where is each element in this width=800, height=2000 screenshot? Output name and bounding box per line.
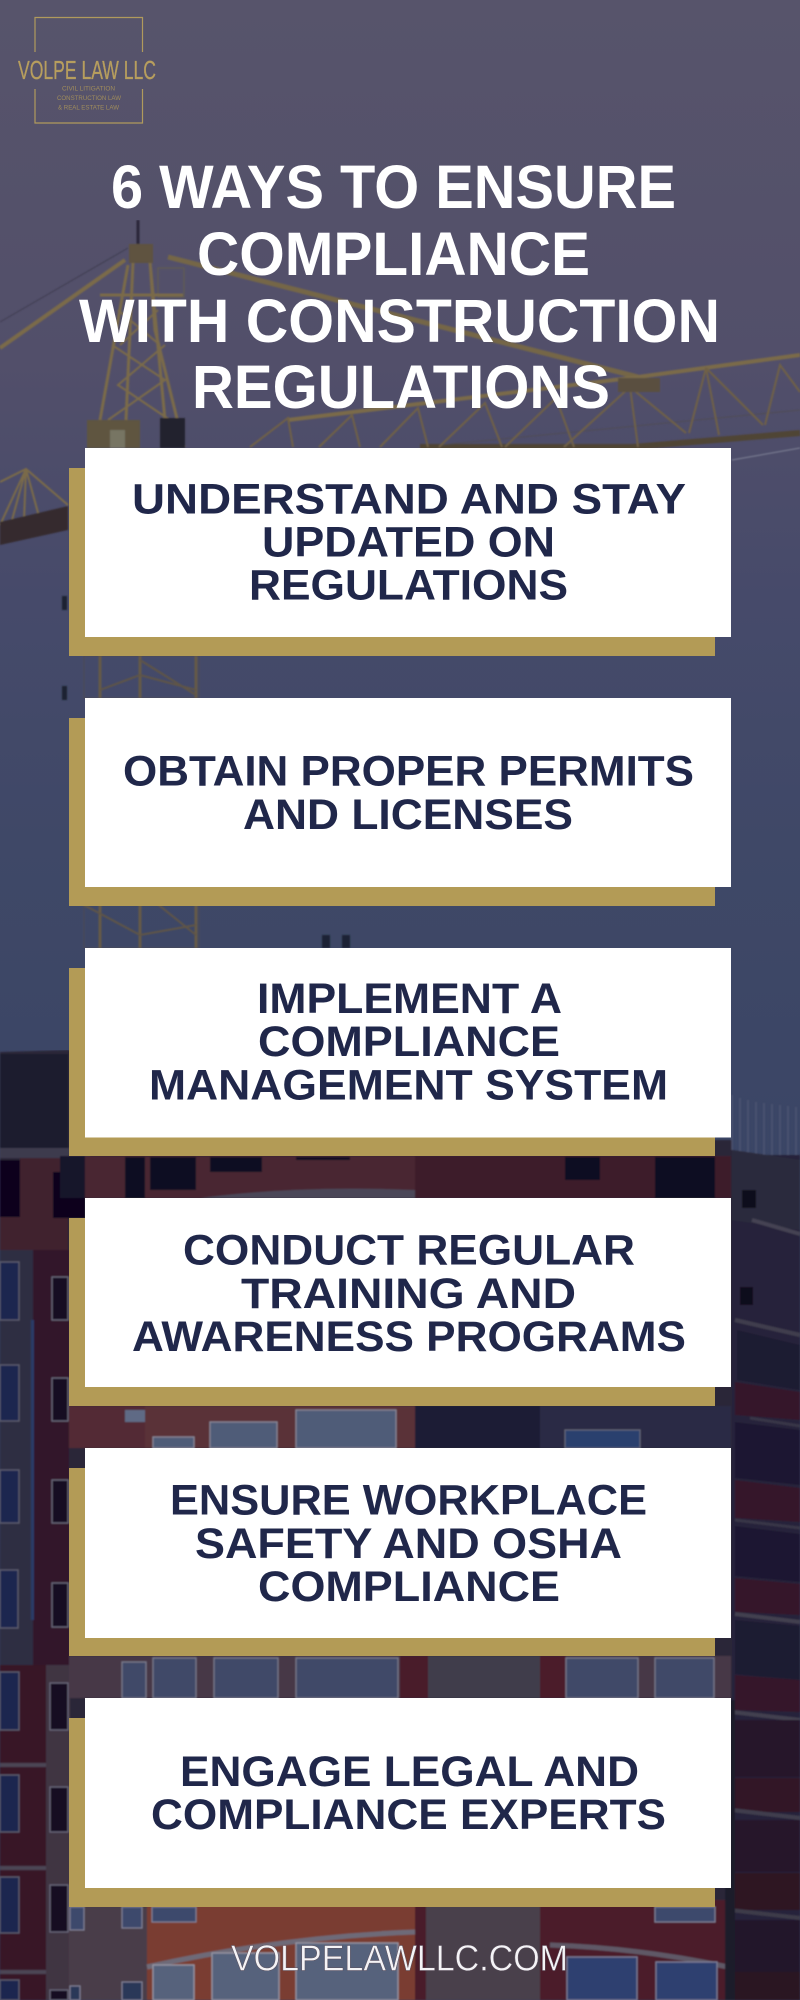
- step 6 text: [151, 1748, 666, 1839]
- white card: [85, 948, 731, 1138]
- step 3 text: COMPLIANCE: [258, 1018, 560, 1066]
- step 3 text: [149, 975, 668, 1110]
- step 5 text: SAFETY AND OSHA: [195, 1520, 622, 1568]
- white card: [85, 1698, 731, 1888]
- step 4 text: AWARENESS PROGRAMS: [132, 1313, 686, 1361]
- left windows: [0, 1262, 19, 1628]
- logo tagline: [57, 86, 121, 112]
- middle strip 3: [69, 1656, 731, 1698]
- panel: step 1: [69, 448, 731, 656]
- step 1 text: UPDATED ON: [262, 518, 555, 566]
- panel: step 5: [69, 1448, 731, 1656]
- step 6 text: ENGAGE LEGAL AND: [180, 1748, 639, 1796]
- logo frame: [35, 18, 142, 123]
- footer website: VOLPELAWLLC.COM: [231, 1938, 568, 1978]
- white card: [85, 1198, 731, 1387]
- background: building: [0, 1050, 800, 2000]
- gold offset block: [69, 1468, 715, 1656]
- title: WITH CONSTRUCTION: [79, 287, 720, 355]
- bottom strip: [69, 1900, 147, 2000]
- middle strip 2: [69, 1406, 145, 1448]
- logo: Volpe Law LLC: [18, 18, 156, 123]
- logo tagline: & REAL ESTATE LAW: [58, 106, 119, 112]
- title: COMPLIANCE: [197, 220, 590, 288]
- logo name: VOLPE LAW LLC: [18, 55, 156, 85]
- gold offset block: [69, 1718, 715, 1907]
- logo tagline: CIVIL LITIGATION: [62, 86, 115, 92]
- step 4 text: CONDUCT REGULAR: [183, 1226, 635, 1274]
- white card: [85, 448, 731, 637]
- right rooftop fence: [732, 1095, 796, 1159]
- step 2 text: AND LICENSES: [243, 791, 573, 839]
- step 1 text: UNDERSTAND AND STAY: [132, 476, 686, 524]
- step 2 text: [123, 748, 694, 839]
- logo tagline: CONSTRUCTION LAW: [57, 96, 121, 102]
- gold offset block: [69, 468, 715, 656]
- panel: step 3: [69, 948, 731, 1156]
- gold offset block: [69, 1218, 715, 1406]
- step 6 text: COMPLIANCE EXPERTS: [151, 1791, 666, 1839]
- step 3 text: IMPLEMENT A: [257, 975, 562, 1023]
- panel: step 6: [69, 1698, 731, 1907]
- title: REGULATIONS: [192, 353, 610, 421]
- white card: [85, 698, 731, 887]
- title: 6 WAYS TO ENSURE: [111, 153, 676, 221]
- right side floors: [732, 1155, 800, 2000]
- step 4 text: [132, 1226, 686, 1361]
- step 1 text: [132, 476, 686, 610]
- step 3 text: MANAGEMENT SYSTEM: [149, 1062, 668, 1110]
- gold offset block: [69, 718, 715, 906]
- white card: [85, 1448, 731, 1638]
- background: tower crane: [0, 220, 800, 948]
- gold offset block: [69, 968, 715, 1156]
- title: [79, 153, 720, 421]
- panel: step 2: [69, 698, 731, 906]
- step 5 text: [170, 1476, 647, 1611]
- middle strip 1: [69, 1156, 731, 1198]
- step 5 text: COMPLIANCE: [258, 1563, 560, 1611]
- step 5 text: ENSURE WORKPLACE: [170, 1476, 647, 1524]
- step 4 text: TRAINING AND: [241, 1270, 576, 1318]
- panel: step 4: [69, 1198, 731, 1406]
- step 2 text: OBTAIN PROPER PERMITS: [123, 748, 694, 796]
- step 1 text: REGULATIONS: [249, 562, 568, 610]
